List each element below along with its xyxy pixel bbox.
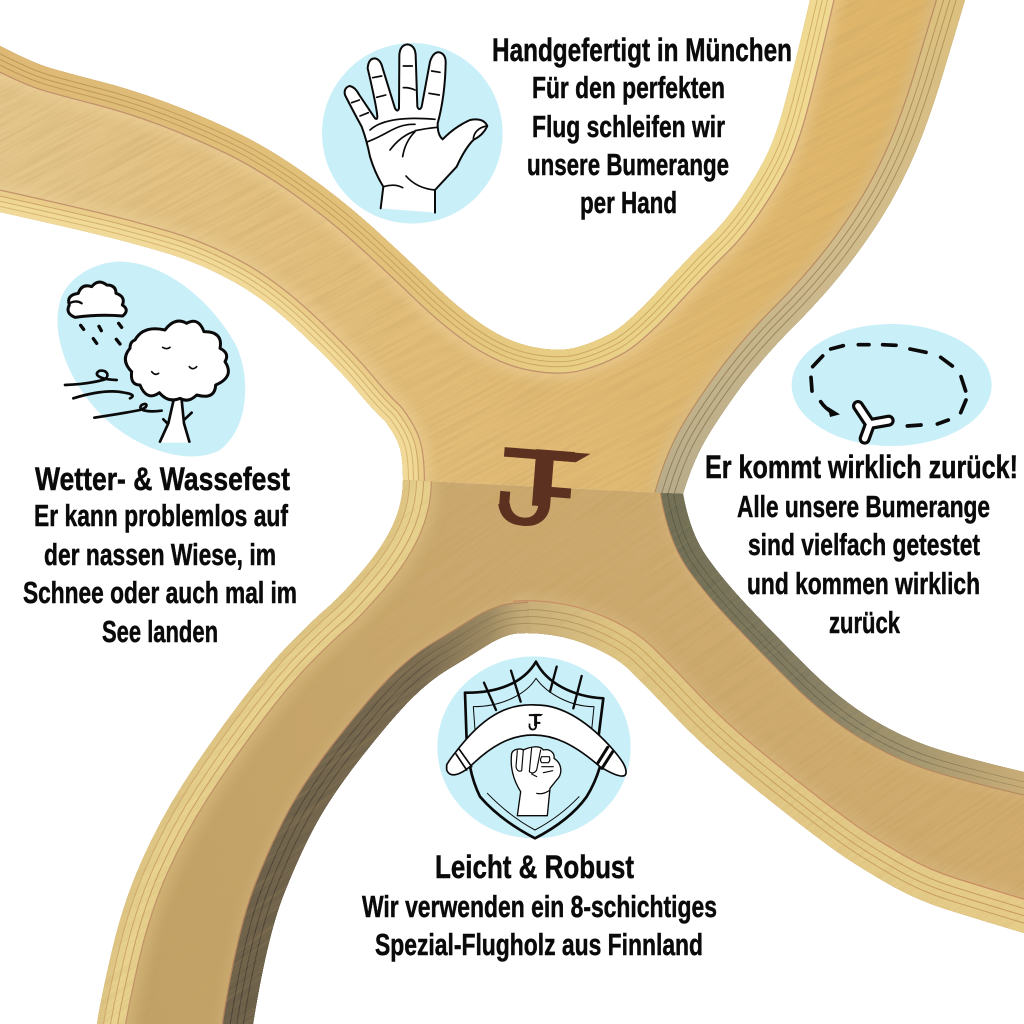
icon: hand in blue circle	[322, 43, 503, 224]
text block: weatherproof description	[23, 498, 297, 649]
burnt JF logo: F	[523, 427, 579, 553]
icon: tree, cloud and wind on blue blob	[58, 262, 245, 456]
panel: returns	[705, 324, 1018, 640]
text block: returns description	[737, 489, 990, 640]
text block: handmade description: unsere Bumerange	[527, 147, 729, 182]
icon: shield with boomerang and fist: J	[528, 709, 539, 736]
burnt JF logo: J	[493, 425, 566, 552]
text block: material description: Spezial-Flugholz aus Finnland	[375, 927, 703, 962]
text block: material description: Wir verwenden ein 8-schichtiges	[362, 889, 717, 924]
heading: Leicht & Robust: Leicht & Robust	[435, 849, 634, 885]
heading: Wetter- & Wassefest: Wetter- & Wassefest	[35, 461, 290, 497]
burnt JF logo	[498, 447, 590, 526]
panel: light and robust	[362, 656, 717, 962]
text block: handmade description: Flug schleifen wir	[532, 109, 725, 144]
text block: weatherproof description: Schnee oder auch mal im	[23, 575, 297, 610]
text block: weatherproof description: Er kann problemlos auf	[34, 498, 288, 533]
text block: weatherproof description: See landen	[102, 614, 218, 649]
panel: handmade	[322, 32, 792, 224]
heading: Handgefertigt in München: Handgefertigt in München	[492, 32, 792, 68]
icon: shield with boomerang and fist	[437, 656, 631, 838]
text block: handmade description: per Hand	[580, 185, 677, 220]
icon: dashed flight path with boomerang	[792, 324, 992, 446]
text block: material description	[362, 889, 717, 962]
icon: shield with boomerang and fist: F	[533, 711, 541, 737]
text block: handmade description: Für den perfekten	[532, 70, 725, 105]
text block: weatherproof description: der nassen Wiese, im	[44, 537, 276, 572]
panel: weatherproof	[23, 262, 297, 649]
lower half: darker wood	[97, 480, 1024, 1024]
text block: handmade description	[527, 70, 729, 220]
upper half: light wood	[0, 0, 1024, 500]
text block: returns description: zurück	[829, 605, 901, 640]
